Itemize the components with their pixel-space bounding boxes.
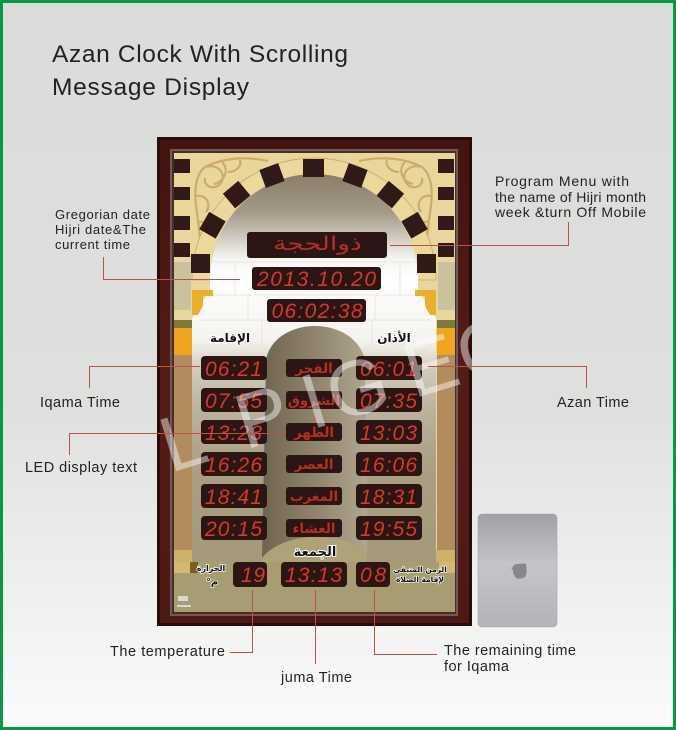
- arch band: [192, 158, 436, 280]
- callout: remaining time: The remaining time: [444, 643, 576, 659]
- display: Hijri month: [247, 232, 387, 258]
- Azan times column: 19:55: [360, 518, 417, 541]
- laptop: [478, 514, 557, 627]
- watermark: LPIGEO: [149, 297, 529, 489]
- makers mark: [177, 596, 191, 607]
- display: temperature: [233, 562, 267, 587]
- prayer names column: العشاء: [292, 521, 336, 537]
- Azan times column: 16:06: [360, 454, 417, 477]
- Iqama times column: 13:23: [205, 422, 262, 445]
- title: Azan Clock With Scrolling: [52, 41, 348, 68]
- display: Hijri month: ذوالحجة: [273, 234, 362, 255]
- main arched panel: [192, 174, 436, 562]
- Iqama times column: 18:41: [205, 486, 262, 509]
- temperature label: [197, 564, 226, 588]
- clock product: [157, 137, 472, 626]
- callout: temperature: The temperature: [110, 644, 225, 660]
- display: current time: 06:02:38: [272, 300, 363, 323]
- prayer names column: [286, 359, 342, 537]
- Azan times column: 06:01: [360, 358, 417, 381]
- column squares: [174, 159, 454, 257]
- central column: [262, 326, 367, 562]
- callout: Gregorian and Hijri date: [55, 207, 240, 280]
- icon: apple logo: [507, 564, 527, 579]
- callout: Gregorian and Hijri date: Gregorian date: [55, 207, 150, 222]
- brick lines: [192, 262, 436, 345]
- temperature label: °م: [206, 577, 218, 588]
- corner ornaments: [195, 158, 432, 242]
- Iqama times column: 06:21: [205, 358, 262, 381]
- wooden frame: [157, 137, 472, 626]
- clock face artwork: [174, 153, 455, 612]
- callout: remaining time: [374, 590, 576, 675]
- display: Gregorian date: 2013.10.20: [256, 268, 376, 291]
- Iqama times column: 20:15: [204, 518, 262, 541]
- callout: program menu: [390, 173, 646, 246]
- callout: temperature: [110, 590, 252, 660]
- callout: program menu: Program Menu with: [495, 173, 629, 189]
- callout: Azan time: Azan Time: [557, 395, 629, 411]
- side columns: [174, 262, 455, 562]
- Iqama times column: 16:26: [205, 454, 262, 477]
- display: juma time: 13:13: [285, 564, 342, 587]
- callout: LED display text: LED display text: [25, 460, 137, 476]
- Azan times column: [356, 356, 422, 541]
- heading: Azan: الأذان: [377, 330, 411, 345]
- prayer names column: المغرب: [290, 489, 338, 505]
- callout: Gregorian and Hijri date: current time: [55, 237, 130, 252]
- remaining time label: لإقامة الصلاة: [396, 575, 444, 584]
- remaining time label: الزمن المتبقي: [393, 565, 447, 574]
- title: Message Display: [52, 74, 250, 101]
- callout: program menu: week &turn Off Mobile: [494, 204, 646, 220]
- arch squares: [191, 159, 436, 273]
- prayer names column: الظهر: [293, 425, 334, 441]
- Iqama times column: [201, 356, 267, 541]
- callout: LED display text: [25, 434, 283, 476]
- callout: Iqama time: [40, 366, 200, 411]
- remaining time label: [393, 565, 447, 584]
- callout: program menu: the name of Hijri month: [495, 189, 646, 205]
- Azan times column: 07:35: [360, 390, 417, 413]
- prayer names column: الشروق: [288, 393, 340, 409]
- display: temperature: 19: [241, 564, 265, 587]
- prayer names column: الفجر: [294, 361, 333, 377]
- prayer names column: العصر: [293, 457, 334, 473]
- Iqama times column: 07:55: [205, 390, 262, 413]
- display: remaining time: 08: [360, 564, 386, 587]
- callout: Iqama time: Iqama Time: [40, 395, 120, 411]
- callout: Azan time: [428, 366, 629, 411]
- callout: remaining time: for Iqama: [444, 659, 510, 675]
- title: [52, 41, 348, 101]
- heading: Friday: الجمعة: [294, 545, 336, 560]
- callout: Gregorian and Hijri date: Hijri date&The: [55, 222, 146, 237]
- temperature label: الحرارة: [197, 564, 226, 573]
- yellow brackets: [192, 290, 436, 315]
- callout: juma time: [280, 590, 352, 686]
- callout: juma time: juma Time: [280, 670, 352, 686]
- Azan times column: 13:03: [360, 422, 417, 445]
- bottom band: [174, 562, 455, 612]
- heading: Iqama: الإقامة: [210, 331, 250, 345]
- Azan times column: 18:31: [360, 486, 417, 509]
